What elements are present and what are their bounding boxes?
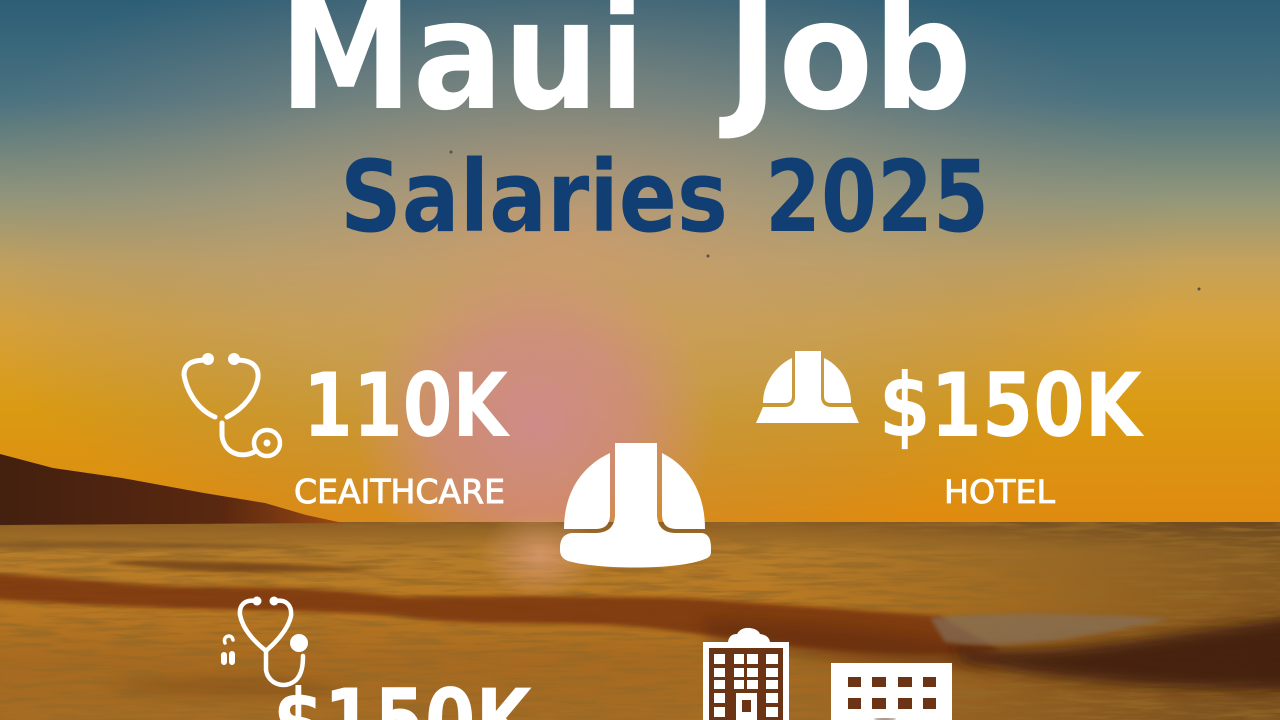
icon: large hard hat — [560, 443, 711, 568]
icon: tall hotel building — [703, 628, 789, 720]
background: ocean — [0, 510, 1280, 720]
background: distant birds — [450, 150, 1200, 290]
icon: wide hotel building — [831, 663, 952, 720]
icon: stethoscope healthcare — [184, 353, 280, 456]
stat: $150K: $150K — [879, 354, 1144, 457]
stat: 110K: 110K — [303, 354, 510, 457]
label: HOTEL: HOTEL — [944, 473, 1055, 511]
subtitle: Salaries 2025 — [340, 140, 989, 255]
icon: small hard hat — [756, 351, 859, 423]
background: left headland — [0, 454, 343, 525]
title: Maui Job — [279, 0, 972, 144]
icon: second stethoscope — [224, 596, 308, 685]
background: sunset sky — [0, 0, 1280, 524]
background: pink sun glow — [355, 260, 715, 590]
label: CEAITHCARE: CEAITHCARE — [294, 472, 505, 511]
subtitle: Salaries 2025: 2025 — [765, 140, 989, 255]
background: central haze — [0, 0, 1180, 570]
subtitle: Salaries 2025: Salaries — [340, 140, 728, 255]
